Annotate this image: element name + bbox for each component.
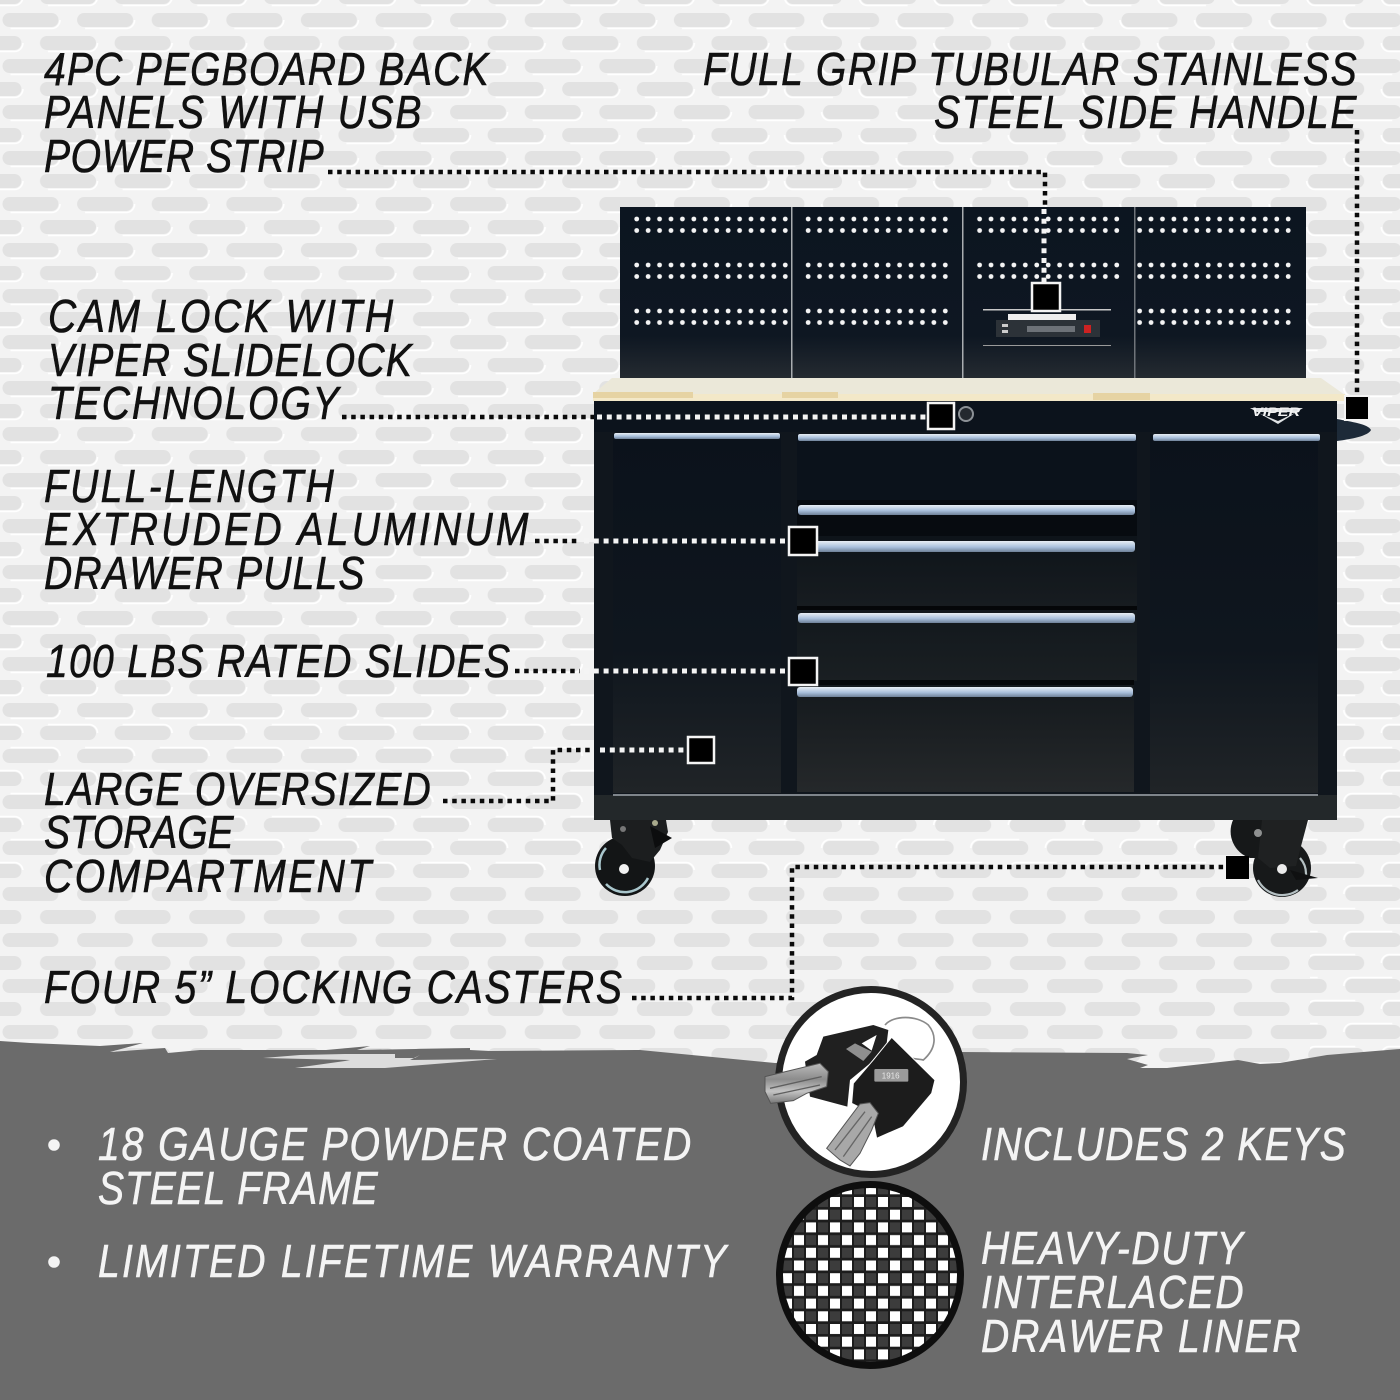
bullet bbox=[48, 1140, 60, 1150]
pegboard back panels bbox=[620, 207, 1306, 379]
leader line: pegboard bbox=[328, 172, 1060, 311]
bottom grey band with torn edge bbox=[0, 1041, 1400, 1400]
icon: interlaced drawer liner in circle bbox=[776, 1182, 964, 1370]
callout text: pegboard back panels: POWER STRIP bbox=[44, 131, 324, 183]
front key: 1916 bbox=[882, 1072, 900, 1081]
side handle bbox=[1337, 419, 1371, 441]
callout text: drawer pulls: FULL-LENGTH bbox=[44, 461, 334, 513]
callout text: cam lock bbox=[48, 291, 414, 430]
key ring bbox=[885, 1017, 934, 1060]
left door bbox=[613, 433, 781, 793]
cabinet frame bbox=[594, 401, 1337, 820]
drawers bbox=[797, 434, 1137, 792]
callout text: cam lock: CAM LOCK WITH bbox=[48, 291, 393, 343]
left caster bbox=[595, 820, 672, 896]
USB power strip bbox=[983, 309, 1111, 346]
feature: keys: INCLUDES 2 KEYS bbox=[981, 1119, 1346, 1171]
bottom rail bbox=[594, 795, 1337, 820]
feature: steel frame: STEEL FRAME bbox=[98, 1163, 378, 1215]
Viper logo: VIPER bbox=[1252, 405, 1300, 419]
callout text: storage compartment: LARGE OVERSIZED bbox=[44, 764, 431, 816]
feature: drawer liner: HEAVY-DUTY bbox=[981, 1223, 1246, 1275]
product: mobile workbench bbox=[593, 207, 1371, 897]
callout text: side handle: FULL GRIP TUBULAR STAINLESS bbox=[703, 44, 1357, 96]
leader line: side handle bbox=[1345, 130, 1369, 420]
trim line bbox=[613, 794, 1318, 796]
front key bbox=[827, 1037, 935, 1166]
leader line: storage compartment bbox=[443, 737, 714, 801]
callout text: cam lock: VIPER SLIDELOCK bbox=[48, 335, 414, 387]
feature list bbox=[48, 1119, 729, 1288]
feature: steel frame bbox=[98, 1119, 691, 1215]
leader line: drawer pulls bbox=[535, 527, 817, 555]
icon: keys in circle bbox=[765, 990, 964, 1174]
wood worktop bbox=[593, 378, 1345, 401]
right caster bbox=[1231, 820, 1318, 897]
callout text: casters: FOUR 5” LOCKING CASTERS bbox=[44, 962, 622, 1014]
leader line: slides bbox=[515, 658, 817, 685]
cam lock bbox=[959, 407, 973, 421]
callout text: pegboard back panels: 4PC PEGBOARD BACK bbox=[44, 44, 491, 96]
callout text: drawer pulls: EXTRUDED ALUMINUM bbox=[44, 504, 529, 556]
callout text: storage compartment: COMPARTMENT bbox=[44, 851, 374, 903]
leader line: cam lock bbox=[342, 403, 954, 429]
feature: steel frame: 18 GAUGE POWDER COATED bbox=[98, 1119, 691, 1171]
right door bbox=[1150, 434, 1320, 793]
callout text: slides: 100 LBS RATED SLIDES bbox=[46, 636, 510, 688]
callout text: drawer pulls: DRAWER PULLS bbox=[44, 548, 364, 600]
callout text: pegboard back panels bbox=[44, 44, 491, 183]
feature: drawer liner: INTERLACED bbox=[981, 1267, 1244, 1319]
callout text: side handle bbox=[703, 44, 1357, 139]
callout text: storage compartment bbox=[44, 764, 431, 903]
leader line: casters bbox=[632, 856, 1249, 998]
Viper logo bbox=[1250, 405, 1303, 424]
callout text: cam lock: TECHNOLOGY bbox=[48, 378, 342, 430]
callout text: storage compartment: STORAGE bbox=[44, 807, 234, 859]
callout text: pegboard back panels: PANELS WITH USB bbox=[44, 87, 421, 139]
bullet bbox=[48, 1256, 60, 1268]
callout text: drawer pulls bbox=[44, 461, 529, 600]
frame header shading bbox=[594, 401, 1337, 432]
feature: warranty: LIMITED LIFETIME WARRANTY bbox=[98, 1236, 729, 1288]
feature: drawer liner: DRAWER LINER bbox=[981, 1311, 1301, 1363]
rear key bbox=[765, 1025, 888, 1107]
feature: drawer liner bbox=[981, 1223, 1301, 1363]
callout text: side handle: STEEL SIDE HANDLE bbox=[934, 87, 1357, 139]
